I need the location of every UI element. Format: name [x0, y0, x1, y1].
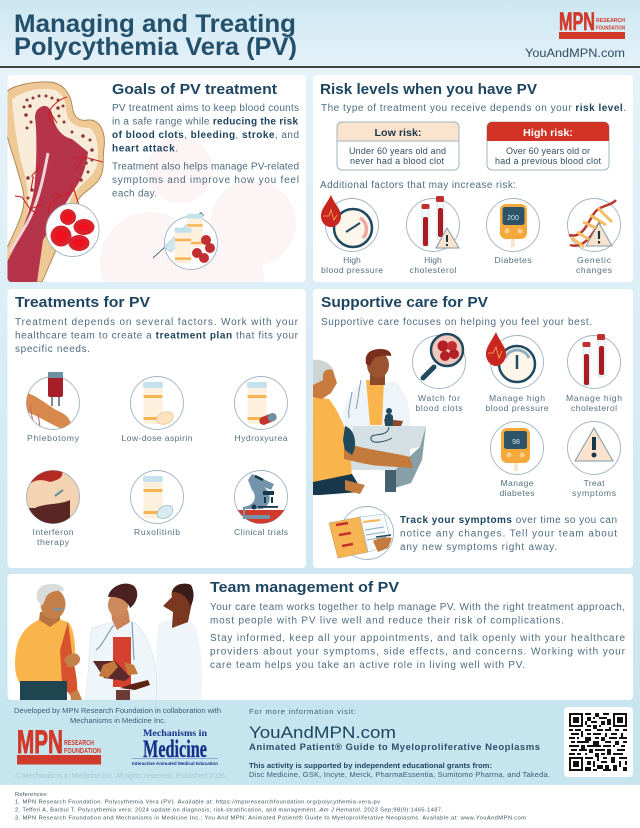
icon: symptom tracker notebook	[329, 506, 394, 560]
icon: watch for blood clots	[412, 334, 466, 388]
heading: Treatments for PV	[15, 295, 150, 311]
card: high risk: High risk:	[523, 127, 573, 139]
text: supportive intro: Supportive care focuses on helping you feel your best.	[321, 317, 592, 328]
footer: more information: Disc Medicine, GSK, Incyte, Merck, PharmaEssentia, Sumitomo Pharma, and Takeda.	[249, 770, 550, 779]
footer: developed by: Mechanisms in Medicine Inc.	[70, 716, 166, 725]
text: treatments intro: Treatment depends on several factors. Work with your	[15, 317, 299, 328]
icon: manage blood pressure	[486, 332, 544, 388]
footer: more information: For more information visit:	[249, 707, 356, 716]
label: Manage	[500, 478, 534, 488]
panel: goals of PV treatment	[8, 75, 306, 282]
text: team paragraphs	[210, 602, 626, 671]
title	[14, 10, 297, 61]
icon: diabetes meter: 200	[507, 215, 519, 222]
text: treatments intro: healthcare team to create a treatment plan that fits your	[15, 330, 299, 342]
copyright: © Mechanisms in Medicine Inc. All rights reserved. Published 2026.	[15, 771, 227, 780]
panel: treatments	[8, 289, 306, 568]
logo: MPN Research Foundation footer: MPN	[17, 724, 63, 760]
logo: MPN Research Foundation footer: FOUNDATION	[64, 748, 101, 755]
label	[486, 393, 549, 413]
card: high risk	[487, 122, 609, 170]
logo: Mechanisms in Medicine: Mechanisms in	[143, 729, 208, 739]
footer: developed by	[14, 706, 221, 725]
label: Low-dose aspirin	[122, 433, 193, 443]
illustration: doctor checking blood pressure	[313, 349, 426, 495]
label: Diabetes	[494, 255, 532, 265]
logo: Mechanisms in Medicine: Interactive Animated Medical Education	[132, 761, 218, 767]
label: High	[343, 255, 361, 265]
footer: more information: Animated Patient® Guide to Myeloproliferative Neoplasms	[249, 742, 540, 753]
label: changes	[576, 265, 612, 275]
logo: MPN Research Foundation header: MPN	[559, 8, 595, 36]
text: treatments intro	[15, 317, 299, 355]
text: risk intro: The type of treatment you receive depends on your risk level.	[321, 103, 626, 114]
icon: syringe and medication	[153, 212, 218, 270]
text: goals paragraph: PV treatment aims to keep blood counts	[112, 103, 299, 114]
label	[500, 478, 534, 498]
references: References:	[15, 792, 48, 798]
text: track symptoms: any new symptoms right away.	[400, 542, 557, 553]
text: treatments intro: specific needs.	[15, 344, 90, 355]
footer: more information: YouAndMPN.com	[249, 723, 396, 742]
icon: high blood pressure	[321, 195, 378, 252]
logo: MPN Research Foundation header: RESEARCH	[596, 18, 625, 24]
label: Watch for	[418, 393, 460, 403]
label: Genetic	[577, 255, 612, 265]
card: low risk: Under 60 years old and	[349, 146, 446, 156]
heading: Risk levels when you have PV	[320, 82, 537, 98]
panel: supportive care	[313, 289, 633, 568]
icon: diabetes meter	[486, 198, 540, 252]
logo: MPN Research Foundation header: FOUNDATION	[596, 26, 625, 32]
panel: risk levels	[313, 75, 633, 282]
card: low risk	[337, 122, 459, 170]
text: goals paragraph: each day.	[112, 188, 157, 200]
footer: developed by: Developed by MPN Research Foundation in collaboration with	[14, 706, 221, 715]
label: blood clots	[416, 403, 462, 413]
logo: Mechanisms in Medicine: Medicine	[143, 736, 207, 763]
label: cholesterol	[410, 265, 457, 275]
label	[572, 478, 616, 498]
text: goals paragraph: heart attack.	[112, 144, 178, 154]
website link header: YouAndMPN.com	[525, 48, 625, 60]
icon: manage cholesterol	[568, 334, 620, 388]
heading: Goals of PV treatment	[112, 82, 277, 98]
label: Manage high	[566, 393, 622, 403]
title: Managing and Treating	[14, 10, 296, 38]
label: cholesterol	[571, 403, 617, 413]
label: High	[424, 255, 442, 265]
icon: manage diabetes	[490, 422, 544, 474]
icon: interferon therapy	[24, 470, 80, 525]
text: track symptoms: notice any changes. Tell your team about	[400, 528, 617, 540]
panel: team management	[8, 574, 633, 700]
label: Manage high	[489, 393, 545, 403]
illustration: femur bone with marrow	[7, 82, 104, 282]
heading: Team management of PV	[210, 580, 399, 596]
icon: red blood cells	[46, 204, 99, 256]
heading: Supportive care for PV	[321, 295, 488, 311]
label: diabetes	[500, 488, 534, 498]
label: Ruxolitinib	[134, 527, 180, 537]
icon: hydroxyurea	[234, 376, 288, 430]
text: additional factors: Additional factors that may increase risk:	[320, 180, 516, 191]
label	[416, 393, 462, 413]
label	[32, 527, 74, 547]
text: goals paragraph	[112, 103, 299, 200]
text: goals paragraph: symptoms and improve how you feel	[112, 175, 299, 186]
label: Phlebotomy	[27, 433, 80, 443]
label: blood pressure	[486, 403, 549, 413]
card: low risk: never had a blood clot	[350, 156, 444, 166]
references	[15, 792, 526, 822]
label	[566, 393, 622, 413]
references: 1. MPN Research Foundation. Polycythemia Vera (PV). Available at: https://mpnresearchfoundation.org/polycythemia-vera-pv	[15, 800, 380, 806]
text: goals paragraph: Treatment also helps manage PV-related	[112, 162, 299, 172]
card: high risk: had a previous blood clot	[495, 156, 601, 166]
label: blood pressure	[321, 265, 383, 275]
illustration: care team with patient	[15, 584, 202, 700]
text: goals paragraph: in a safe range while reducing the risk	[112, 116, 298, 128]
references: 3. MPN Research Foundation and Mechanisms in Medicine Inc.: You And MPN: Animated Patient® Guide to Myeloproliferative Neoplasms. Available at: www.YouAndMPN.com	[15, 814, 526, 822]
icon: genetic changes	[568, 198, 620, 252]
text: track symptoms: Track your symptoms over time so you can	[400, 515, 617, 526]
footer: more information	[249, 707, 550, 779]
logo: MPN Research Foundation footer: RESEARCH	[64, 740, 94, 747]
icon: treat symptoms warning	[568, 422, 620, 474]
label: Interferon	[32, 527, 74, 537]
text: team paragraphs: providers about your symptoms, side effects, and concerns. Working with your	[210, 646, 626, 658]
text: team paragraphs: Stay informed, keep all your appointments, and talk openly with your healthcare	[210, 633, 625, 644]
label: Hydroxyurea	[234, 433, 288, 443]
icon: phlebotomy	[26, 372, 80, 430]
card: high risk: Over 60 years old or	[506, 146, 590, 156]
label	[410, 255, 457, 275]
text: track symptoms	[400, 515, 617, 553]
icon: microscope	[234, 470, 288, 525]
label: Clinical trials	[234, 527, 288, 537]
text: team paragraphs: most people with PV live well and reduce their risk of complications.	[210, 616, 564, 626]
card: low risk: Low risk:	[374, 127, 422, 139]
label: therapy	[37, 537, 70, 547]
label: symptoms	[572, 488, 616, 498]
logo: Mechanisms in Medicine	[132, 729, 218, 767]
label: Treat	[584, 478, 605, 488]
text: team paragraphs: care team helps you take an active role in living well with PV.	[210, 660, 525, 671]
icon: low-dose aspirin	[130, 376, 184, 430]
text: team paragraphs: Your care team works together to help manage PV. With the right treatment approach,	[210, 602, 625, 613]
text: goals paragraph: of blood clots, bleeding, stroke, and	[112, 130, 299, 141]
label	[321, 255, 383, 275]
icon: manage diabetes: 98	[512, 439, 520, 446]
icon: high cholesterol	[406, 196, 460, 252]
references: 2. Tefferi A, Barbui T. Polycythemia vera: 2024 update on diagnosis, risk-stratification, and management. Am J Hematol. 2023 Sep;98(9):1465-1487.	[15, 808, 443, 814]
QR code	[564, 707, 633, 777]
label	[576, 255, 612, 275]
footer: more information: This activity is supported by independent educational grants from:	[249, 761, 492, 770]
background blood cells	[100, 137, 296, 282]
title: Polycythemia Vera (PV)	[14, 33, 297, 61]
icon: ruxolitinib	[130, 470, 184, 524]
